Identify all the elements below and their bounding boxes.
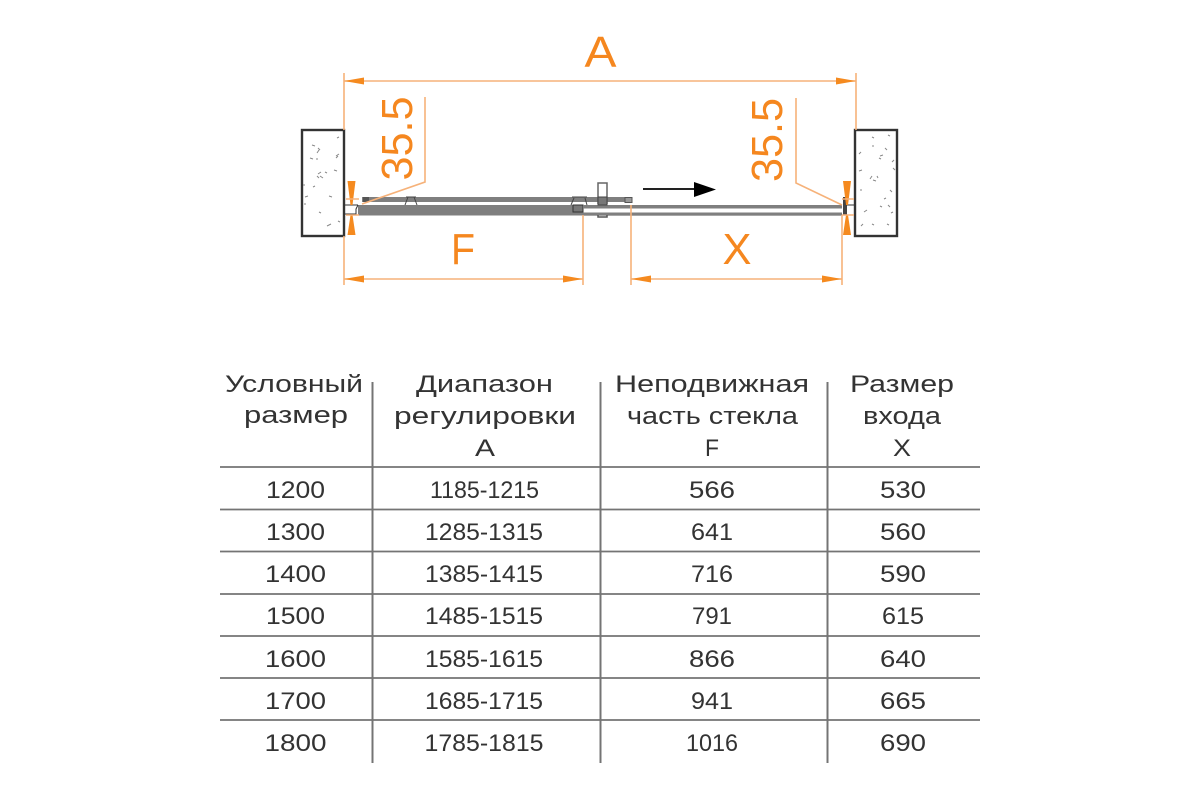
header: adjustment range: Диапазон (416, 371, 553, 398)
row 1300: 641 (691, 519, 733, 546)
row 1800: 1800 (264, 730, 326, 757)
row 1700: 941 (691, 688, 733, 715)
right gap dimension 35.5: 35.5 (743, 98, 792, 182)
row 1600: 640 (880, 646, 926, 673)
left wall (302, 130, 344, 236)
header: entry size (850, 371, 954, 462)
header: adjustment range (394, 371, 576, 462)
handle (598, 183, 607, 217)
row 1400: 716 (691, 561, 733, 588)
row 1800 (264, 730, 926, 757)
row 1500 (266, 603, 924, 630)
row 1600: 1585-1615 (425, 646, 543, 673)
dimension X (631, 205, 842, 285)
row 1200: 1185-1215 (430, 477, 539, 504)
row 1800: 1785-1815 (424, 730, 544, 757)
fixed glass panel (354, 197, 632, 216)
left gap dimension 35.5 (346, 96, 425, 235)
right wall fitting (843, 197, 855, 215)
row 1600: 1600 (265, 646, 326, 673)
row 1800: 690 (880, 730, 926, 757)
row 1400: 590 (880, 561, 926, 588)
right wall (855, 130, 897, 236)
row 1400: 1385-1415 (425, 561, 543, 588)
row 1700: 1700 (265, 688, 326, 715)
row 1400: 1400 (265, 561, 326, 588)
row 1500: 1500 (266, 603, 325, 630)
table grid (220, 382, 980, 763)
row 1700: 665 (880, 688, 926, 715)
row 1700: 1685-1715 (425, 688, 543, 715)
header: fixed glass part: F (705, 435, 719, 462)
header: fixed glass part (615, 371, 809, 462)
left gap dimension 35.5: 35.5 (373, 96, 422, 180)
header: nominal size: Условный (225, 371, 363, 398)
row 1500: 791 (692, 603, 732, 630)
row 1200: 530 (880, 477, 926, 504)
row 1700 (265, 688, 926, 715)
dimension F: F (451, 225, 475, 274)
rollers (405, 197, 587, 205)
header: nominal size: размер (244, 402, 348, 429)
row 1200: 566 (689, 477, 735, 504)
door plan diagram (302, 28, 897, 285)
size table (220, 371, 980, 763)
row 1500: 615 (882, 603, 924, 630)
header: entry size: X (893, 435, 911, 462)
row 1800: 1016 (686, 730, 738, 757)
row 1200: 1200 (266, 477, 325, 504)
header: fixed glass part: часть стекла (627, 403, 799, 430)
header: entry size: входа (863, 403, 942, 430)
header: fixed glass part: Неподвижная (615, 371, 809, 398)
row 1400 (265, 561, 926, 588)
header: adjustment range: A (475, 435, 495, 462)
sliding door panel (583, 198, 842, 216)
row 1300: 560 (880, 519, 926, 546)
row 1300: 1300 (266, 519, 325, 546)
row 1600: 866 (689, 646, 735, 673)
dimension F (344, 215, 583, 285)
header: adjustment range: регулировки (394, 403, 576, 430)
row 1200 (266, 477, 926, 504)
row 1500: 1485-1515 (425, 603, 543, 630)
icon: sliding direction arrow (643, 182, 716, 197)
header: entry size: Размер (850, 371, 954, 398)
right gap dimension 35.5 (743, 98, 854, 235)
header: nominal size (225, 371, 363, 429)
dimension A (344, 28, 856, 130)
left wall fitting (344, 205, 358, 214)
dimension A: A (584, 28, 617, 77)
dimension X: X (722, 225, 752, 274)
row 1600 (265, 646, 926, 673)
row 1300: 1285-1315 (425, 519, 543, 546)
row 1300 (266, 519, 926, 546)
